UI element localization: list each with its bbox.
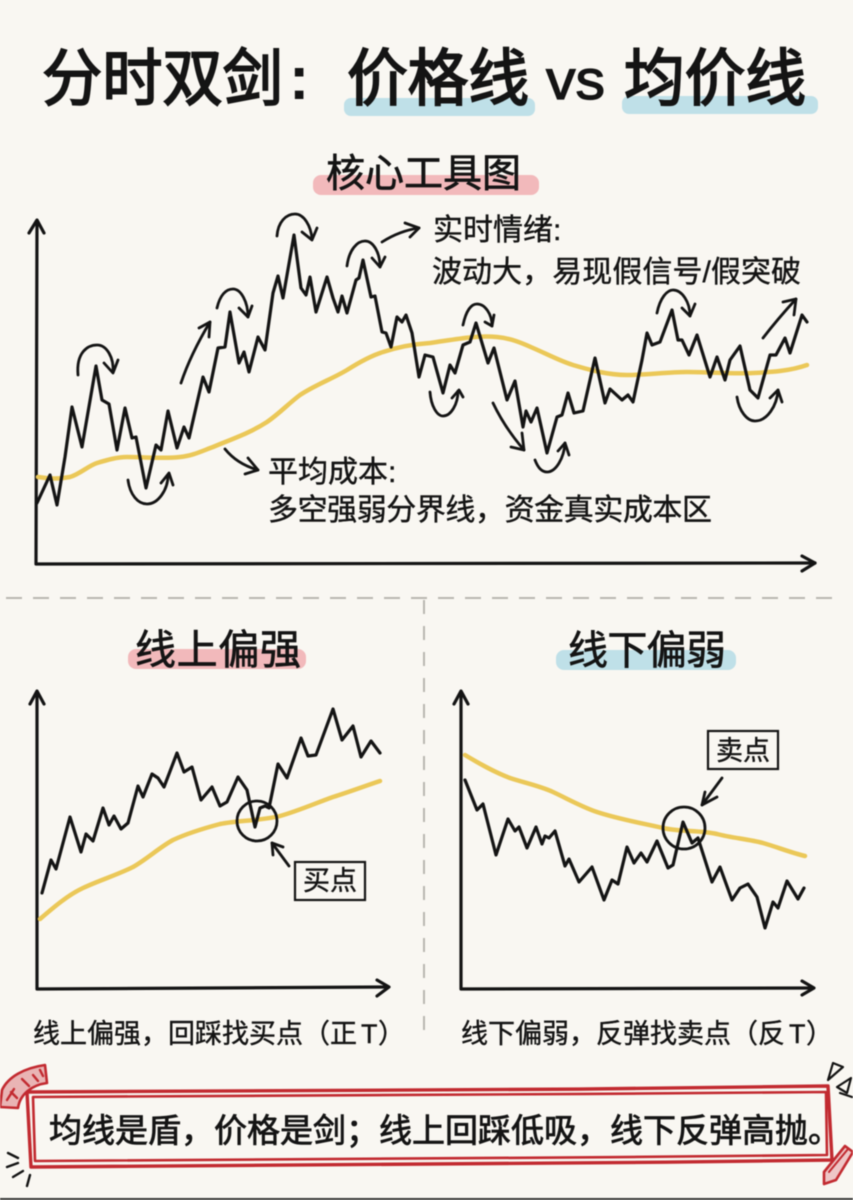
caption: above line: T xyxy=(361,1019,378,1049)
title: 分时双剑 xyxy=(42,45,283,114)
annotation: average cost: 平均成本: xyxy=(268,456,396,489)
arrow to sell point xyxy=(702,778,722,805)
price line xyxy=(37,235,807,505)
panel: above line chart xyxy=(30,691,389,996)
caption: above line: ） xyxy=(378,1019,405,1049)
banner text: 均线是盾，价格是剑；线上回踩低吸，线下反弹高抛。 xyxy=(49,1112,841,1149)
heading: above line is strong: 线上偏强 xyxy=(135,627,301,673)
annotation: average cost xyxy=(268,456,712,527)
sell point label: 卖点 xyxy=(716,736,770,766)
average line xyxy=(465,755,805,856)
annotation: real-time sentiment: 波动大，易现假信号/假突破 xyxy=(432,256,801,289)
average line xyxy=(40,781,380,919)
axes xyxy=(30,691,389,996)
chart axes xyxy=(29,220,815,571)
annotation: average cost: 多空强弱分界线，资金真实成本区 xyxy=(268,494,712,527)
decoration: spark lines left xyxy=(7,1153,30,1186)
title: 价格线 xyxy=(347,45,529,114)
buy point circle xyxy=(237,801,277,841)
heading: below line is weak: 线下偏弱 xyxy=(568,629,726,673)
caption: below line: T xyxy=(789,1019,806,1049)
title xyxy=(42,44,818,116)
buy point label xyxy=(295,862,365,900)
caption: below line: 线下偏弱，反弹找卖点（反 xyxy=(461,1019,785,1049)
price line xyxy=(42,709,380,893)
annotation: real-time sentiment: 实时情绪: xyxy=(433,214,561,247)
title: vs xyxy=(546,48,605,111)
caption: above line: 线上偏强，回踩找买点（正 xyxy=(33,1019,357,1049)
buy point label: 买点 xyxy=(303,866,357,896)
title: 均价线 xyxy=(624,45,806,114)
average price line xyxy=(38,337,807,478)
summary banner xyxy=(0,1063,853,1186)
volatility arrows xyxy=(78,214,796,504)
decoration: spark marks right xyxy=(828,1063,852,1097)
decoration: pencil xyxy=(824,1146,853,1184)
price line xyxy=(465,780,804,928)
banner frame xyxy=(27,1086,832,1167)
bottom edge strip xyxy=(0,1198,853,1200)
arrow to buy point xyxy=(272,843,289,866)
decoration: ribbon corner xyxy=(0,1065,47,1108)
axes xyxy=(454,691,814,995)
annotation: real-time sentiment xyxy=(432,214,801,289)
sell point circle xyxy=(663,807,705,849)
heading: core tool chart: 核心工具图 xyxy=(326,153,521,196)
panel: main chart xyxy=(29,214,815,571)
panel: below line chart xyxy=(454,691,814,995)
caption: below line: ） xyxy=(806,1019,833,1049)
title: : xyxy=(289,44,309,112)
sell point label xyxy=(708,731,778,769)
